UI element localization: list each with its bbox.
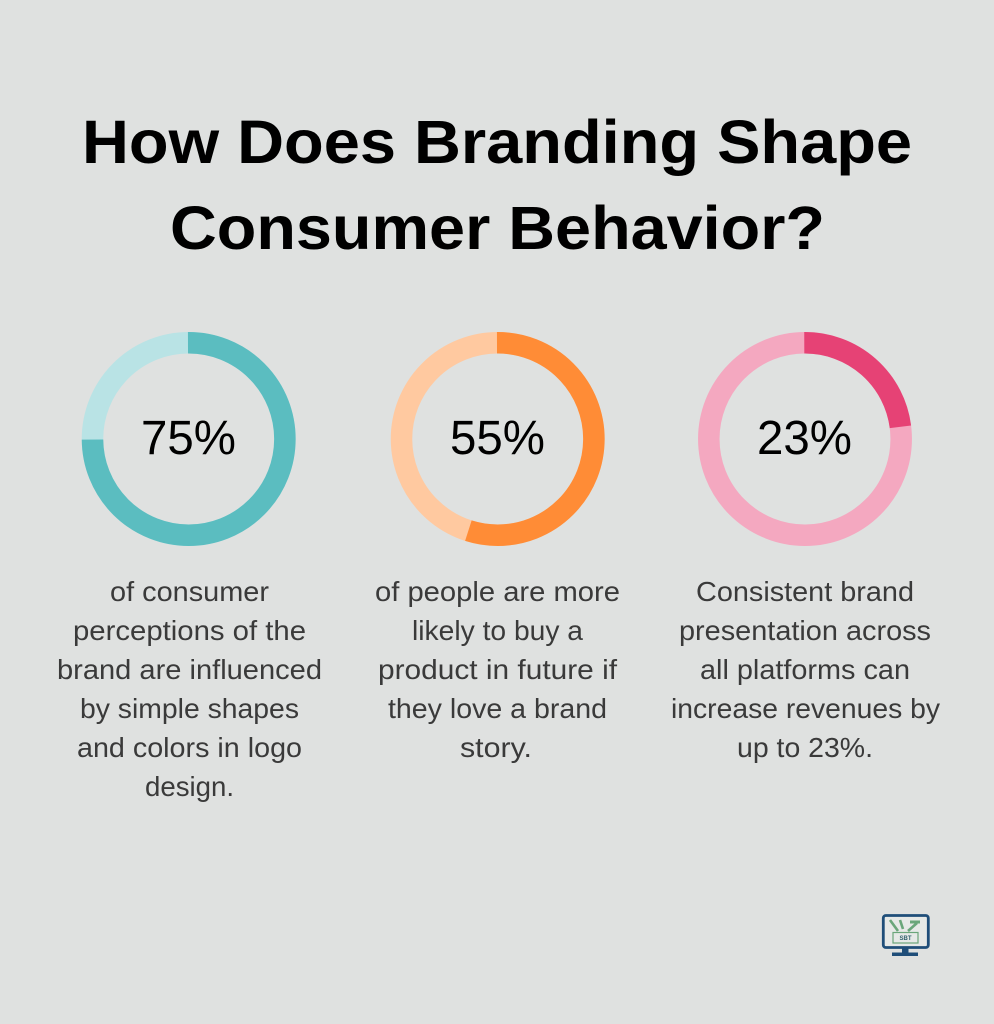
description: brand consistency xyxy=(671,576,940,763)
value: 75%: 75% xyxy=(141,411,236,465)
description: logo design xyxy=(57,576,322,802)
title: Consumer Behavior? xyxy=(170,194,825,262)
value: 23%: 23% xyxy=(757,411,852,465)
description: brand consistency: Consistent brand xyxy=(696,576,914,607)
description: logo design: brand are influenced xyxy=(57,654,322,685)
description: brand story: likely to buy a xyxy=(412,615,583,646)
description: brand story: product in future if xyxy=(378,654,617,685)
description: brand story: they love a brand xyxy=(388,693,607,724)
description: brand consistency: up to 23%. xyxy=(737,732,873,763)
donut chart: 55% xyxy=(402,343,594,535)
description: logo design: and colors in logo xyxy=(77,732,302,763)
description: logo design: design. xyxy=(145,771,234,802)
panel: 23% stat xyxy=(671,343,940,763)
description: brand consistency: all platforms can xyxy=(700,654,910,685)
title: How Does Branding Shape xyxy=(82,108,912,176)
description: logo design: perceptions of the xyxy=(73,615,306,646)
panel: 55% stat xyxy=(375,343,620,763)
description: logo design: of consumer xyxy=(110,576,269,607)
panel: 75% stat xyxy=(57,343,322,802)
icon: monitor with toolbox logo xyxy=(883,916,928,956)
description: logo design: by simple shapes xyxy=(80,693,299,724)
description: brand consistency: increase revenues by xyxy=(671,693,940,724)
description: brand story xyxy=(375,576,620,763)
description: brand story: of people are more xyxy=(375,576,620,607)
title xyxy=(82,108,912,262)
donut chart: 23% xyxy=(709,343,901,535)
donut chart: 75% xyxy=(92,343,285,535)
icon: monitor with toolbox logo: SBT xyxy=(900,936,912,942)
description: brand consistency: presentation across xyxy=(679,615,931,646)
value: 55%: 55% xyxy=(450,411,545,465)
description: brand story: story. xyxy=(460,732,532,763)
